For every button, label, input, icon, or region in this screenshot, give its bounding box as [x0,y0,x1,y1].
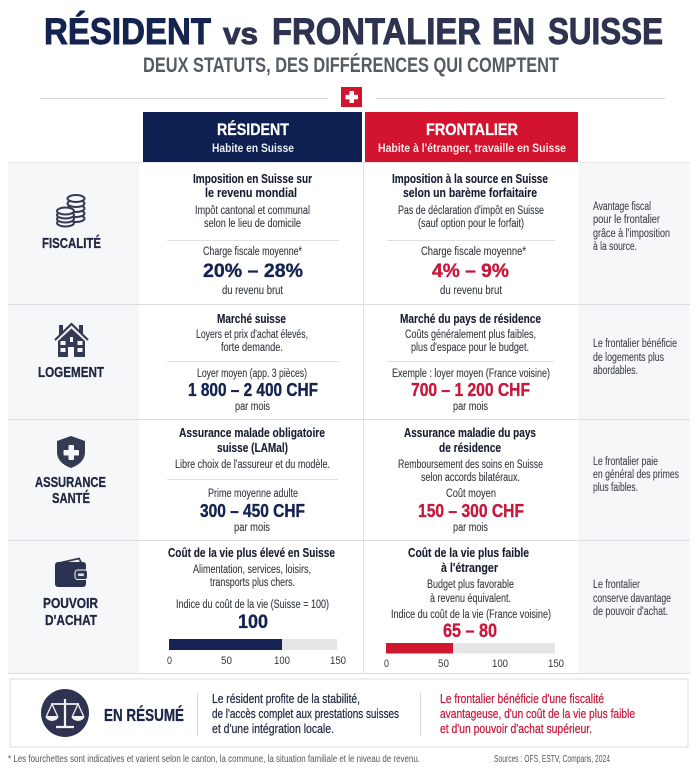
panel: résident fiscalité: Imposition en Suisse sur [193,172,312,186]
title: EN [492,10,535,52]
panel: frontalier fiscalité: 4% – 9% [432,260,509,282]
panel: frontalier pouvoir d'achat: Coût de la vie plus faible [408,546,529,560]
label panel: pouvoir d'achat: POUVOIR [43,596,98,612]
note: assurance: Le frontalier paie [593,456,658,468]
note: pouvoir d'achat: conserve davantage [593,593,671,605]
label panel: fiscalité [42,195,101,252]
note: assurance: plus faibles. [593,482,638,494]
panel: frontalier logement: plus d'espace pour le budget. [411,342,529,354]
panel: frontalier assurance: Remboursement des soins en Suisse [398,459,543,471]
note: assurance [593,456,679,494]
panel: en résumé: EN RÉSUMÉ [104,704,184,725]
label panel: logement [38,324,104,381]
panel: frontalier logement: 700 – 1 200 CHF [411,380,530,400]
panel: frontalier fiscalité [387,172,555,297]
column header: frontalier [365,112,578,162]
label panel: assurance santé [35,436,106,507]
summary: résident: et d'une intégration locale. [212,722,334,736]
panel: résident fiscalité: 20% – 28% [203,260,303,282]
panel: résident pouvoir d'achat: transports plus chers. [210,577,295,589]
panel: frontalier assurance [398,426,543,534]
panel: frontalier assurance: de résidence [439,441,501,455]
summary: résident [212,692,399,736]
panel: résident logement: Loyers et prix d'achat élevés, [196,329,308,341]
panel: frontalier fiscalité: Charge fiscale moyenne* [421,246,526,258]
panel: frontalier logement: par mois [453,401,488,413]
bar chart: résident index: 150 [330,655,346,667]
bar chart: résident index [167,639,346,667]
summary: frontalier [440,692,635,736]
panel: frontalier assurance: par mois [453,522,488,534]
bar chart: résident index: 50 [221,655,232,667]
panel: résident logement [167,312,339,413]
bar chart: résident index: 0 [167,655,172,667]
panel: résident assurance: Assurance malade obligatoire [179,426,325,440]
panel: résident logement: par mois [235,401,270,413]
note: pouvoir d'achat [593,579,671,618]
label panel: pouvoir d'achat [43,558,98,629]
note: fiscalité: pour le frontalier [593,214,660,226]
sources: Sources : OFS, ESTV, Comparis, 2024 [494,753,610,765]
panel: résident fiscalité: le revenu mondial [205,186,297,200]
panel: résident assurance: suisse (LAMal) [217,441,288,455]
title: vs [223,16,258,51]
panel: side notes column [578,163,690,673]
summary: frontalier: avantageuse, d'un coût de la vie plus faible [440,707,635,721]
note: logement: abordables. [593,365,638,377]
panel: frontalier pouvoir d'achat [384,546,564,670]
title: SUISSE [548,10,663,52]
note: pouvoir d'achat: Le frontalier [593,579,640,591]
panel: résident logement: 1 800 – 2 400 CHF [188,380,318,400]
panel: résident assurance: Libre choix de l'assureur et du modèle. [175,459,330,471]
panel: frontalier pouvoir d'achat: à l'étranger [441,561,498,575]
panel: résident fiscalité [167,172,339,297]
panel: résident fiscalité: selon le lieu de domicile [204,218,301,230]
bar chart: frontalier index: 100 [492,658,508,670]
label panel: fiscalité: FISCALITÉ [42,235,101,252]
panel: résident logement: Loyer moyen (app. 3 pièces) [197,368,307,380]
panel: frontalier fiscalité: Imposition à la source en Suisse [392,172,548,186]
column header: résident: RÉSIDENT [217,120,290,139]
panel: frontalier logement: Coûts généralement plus faibles, [405,329,536,341]
title: FRONTALIER [272,10,481,52]
panel: frontalier assurance: Coût moyen [446,488,496,500]
note: logement: de logements plus [593,352,664,364]
panel: frontalier pouvoir d'achat: Indice du coût de la vie (France voisine) [391,609,551,621]
panel: frontalier logement [387,312,554,413]
panel: frontalier fiscalité: (sauf option pour le forfait) [418,218,524,230]
panel: résident pouvoir d'achat: 100 [238,611,268,633]
panel: frontalier fiscalité: Pas de déclaration d'impôt en Suisse [398,205,544,217]
note: fiscalité [593,201,670,253]
title: RÉSIDENT [44,10,211,52]
note: fiscalité: à la source. [593,241,637,253]
label panel: assurance santé: SANTÉ [52,490,90,507]
column header: frontalier: Habite à l'étranger, travaille en Suisse [378,141,566,155]
panel: résident fiscalité: du revenu brut [222,285,284,297]
panel: frontalier pouvoir d'achat: Budget plus favorable [427,579,514,591]
bar chart: frontalier index: 0 [384,658,389,670]
summary: frontalier: Le frontalier bénéficie d'une fiscalité [440,692,604,706]
icon: Swiss flag [341,87,362,107]
panel: frontalier pouvoir d'achat: à revenu équivalent. [430,593,511,605]
subtitle: DEUX STATUTS, DES DIFFÉRENCES QUI COMPTENT [143,54,559,77]
panel: frontalier assurance: selon accords bilatéraux. [421,472,520,484]
bar chart: résident index: 100 [274,655,290,667]
bar chart: frontalier index: 50 [438,658,449,670]
column header: résident [143,112,362,162]
title [44,10,663,52]
panel: frontalier assurance: Assurance maladie du pays [404,426,536,440]
note: fiscalité: grâce à l'imposition [593,228,670,240]
footnote: * Les fourchettes sont indicatives et varient selon le canton, la commune, la situation familiale et le niveau de revenu. [8,753,420,765]
bar chart: frontalier index [384,643,564,670]
note: pouvoir d'achat: de pouvoir d'achat. [593,606,668,618]
panel: résident pouvoir d'achat: Alimentation, services, loisirs, [193,564,311,576]
panel: en résumé [10,679,688,747]
panel: résident assurance [167,426,338,534]
panel: résident logement: Marché suisse [217,312,286,326]
label panel: assurance santé: ASSURANCE [35,475,106,491]
icon: scales of justice [41,689,89,737]
panel: résident logement: forte demande. [221,342,283,354]
label panel: logement: LOGEMENT [38,365,104,381]
panel: row label column [8,163,139,673]
panel: frontalier fiscalité: selon un barème forfaitaire [403,186,537,200]
summary: frontalier: et d'un pouvoir d'achat supérieur. [440,722,592,736]
panel: résident fiscalité: Impôt cantonal et communal [195,205,310,217]
panel: résident assurance: par mois [234,522,270,534]
panel: frontalier logement: Marché du pays de résidence [400,312,541,326]
column header: frontalier: FRONTALIER [426,120,518,139]
panel: résident pouvoir d'achat: Indice du coût de la vie (Suisse = 100) [176,599,329,611]
note: logement [593,338,677,377]
panel: résident pouvoir d'achat: Coût de la vie plus élevé en Suisse [168,546,335,560]
column header: résident: Habite en Suisse [212,141,294,155]
panel: résident fiscalité: Charge fiscale moyenne* [203,246,302,258]
panel: résident pouvoir d'achat [167,546,346,667]
summary: résident: de l'accès complet aux prestations suisses [212,707,399,721]
panel: résident assurance: 300 – 450 CHF [200,501,305,521]
panel: résident assurance: Prime moyenne adulte [208,488,298,500]
summary: résident: Le résident profite de la stabilité, [212,692,360,706]
label panel: pouvoir d'achat: D'ACHAT [45,613,97,629]
panel: frontalier fiscalité: du revenu brut [440,285,503,297]
bar chart: frontalier index: 150 [548,658,564,670]
panel: frontalier pouvoir d'achat: 65 – 80 [443,620,497,642]
note: fiscalité: Avantage fiscal [593,201,651,213]
panel: frontalier assurance: 150 – 300 CHF [418,501,524,521]
panel: frontalier logement: Exemple : loyer moyen (France voisine) [392,368,550,380]
